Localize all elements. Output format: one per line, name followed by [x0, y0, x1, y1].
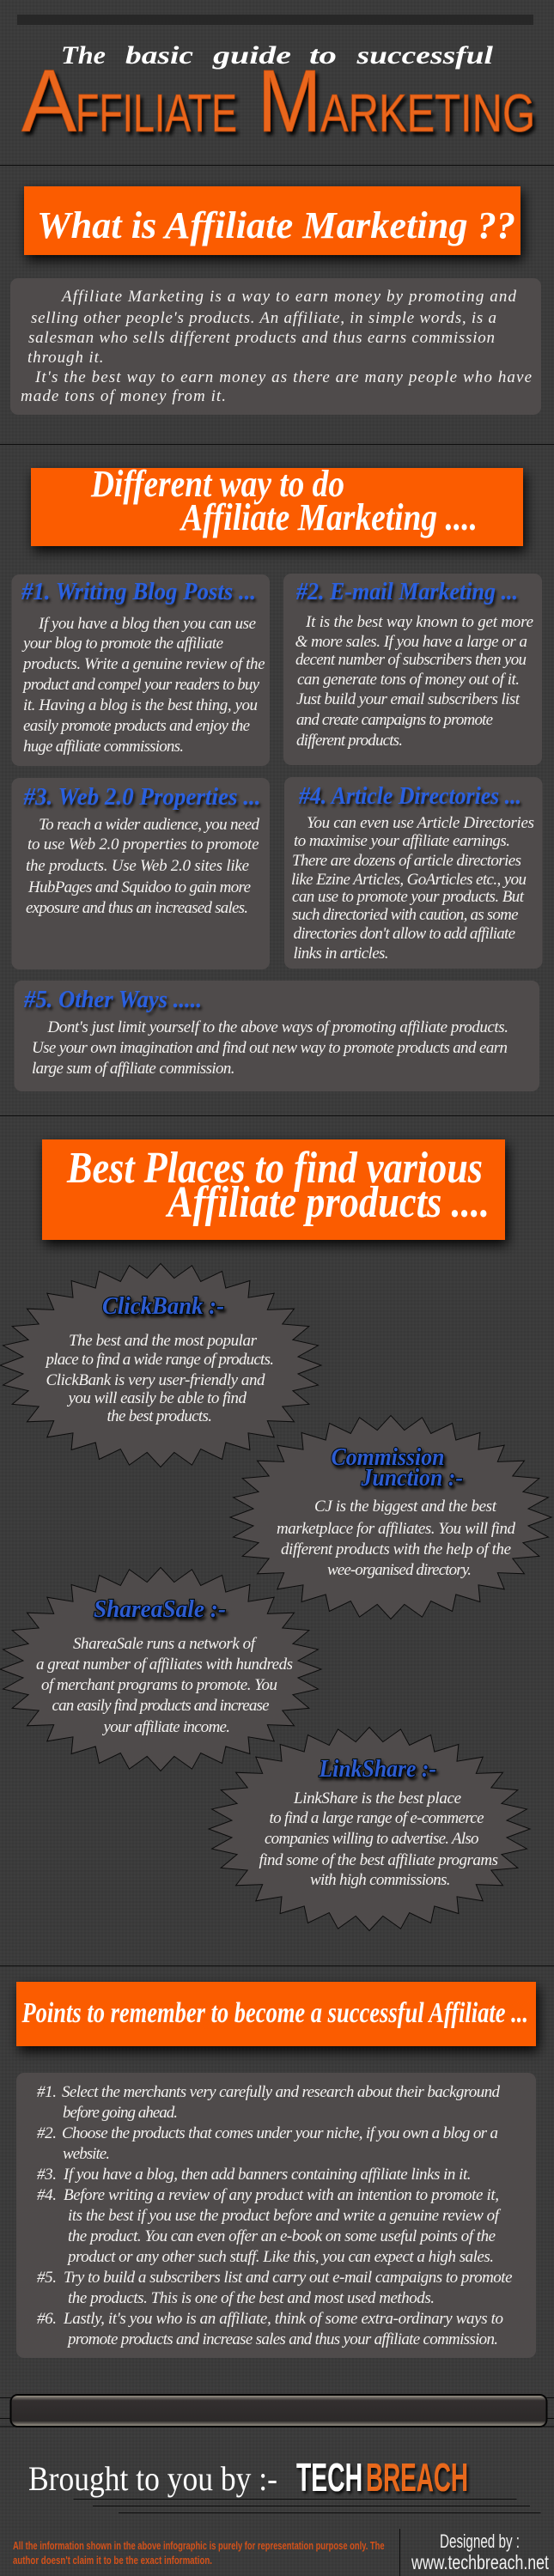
section: points to remember: [16, 1982, 536, 2358]
starburst: LinkShare: LinkShare is the best place: [293, 1789, 461, 1807]
panel: article directories: such directoried with caution, as some: [292, 906, 519, 924]
panel: checklist: [16, 2073, 536, 2358]
starburst: ClickBank: the best products.: [107, 1407, 212, 1425]
panel: web 2.0 properties: HubPages and Squidoo to gain more: [27, 878, 251, 896]
panel: e-mail marketing: and create campaigns to promote: [296, 711, 493, 729]
section: different ways: [12, 463, 543, 1091]
panel: article directories: links in articles.: [294, 945, 388, 963]
panel: definition: It's the best way to earn money as there are many people who have: [34, 368, 532, 386]
panel: writing blog posts: product and compel your readers to buy: [21, 676, 260, 694]
heading: [90, 463, 478, 538]
panel: checklist: #3.: [37, 2166, 57, 2184]
subtitle: basic: [125, 41, 193, 70]
starburst: ShareaSale: can easily find products and increase: [52, 1697, 270, 1715]
logo: TechBreach: BREACH: [366, 2455, 468, 2500]
starburst: Commission Junction: Commission: [332, 1444, 445, 1471]
starburst: ShareaSale: your affiliate income.: [101, 1718, 230, 1736]
starburst: ShareaSale: a great number of affiliates with hundreds: [36, 1656, 293, 1674]
starburst: Commission Junction: CJ is the biggest and the best: [314, 1498, 497, 1516]
main title: Affiliate Marketing: A: [21, 52, 76, 150]
section: best places: [0, 1139, 551, 1930]
panel: article directories: like Ezine Articles, GoArticles etc., you: [291, 871, 527, 889]
panel: article directories: There are dozens of article directories: [292, 852, 521, 870]
subtitle: successful: [356, 41, 494, 70]
subtitle: guide: [212, 41, 291, 70]
panel: other ways: #5. Other Ways .....: [23, 986, 202, 1013]
panel: checklist: the products. This is one of the best and most used methods.: [68, 2289, 435, 2307]
panel: checklist: #6.: [37, 2310, 57, 2328]
logo: TechBreach: [296, 2455, 468, 2500]
panel: other ways: [14, 981, 539, 1091]
starburst: ShareaSale: ShareaSale :-: [94, 1596, 226, 1623]
starburst: Commission Junction: marketplace for affiliates. You will find: [277, 1520, 515, 1538]
starburst: ClickBank: [0, 1264, 321, 1467]
top dark bar: [17, 15, 533, 25]
starburst: ClickBank: ClickBank is very user-friendly and: [46, 1371, 265, 1389]
panel: other ways: large sum of affiliate commission.: [32, 1060, 235, 1078]
starburst: Commission Junction: [230, 1415, 551, 1619]
panel: checklist: Lastly, it's you who is an affiliate, think of some extra-ordinary ways to: [63, 2310, 503, 2328]
starburst: ShareaSale: ShareaSale runs a network of: [73, 1635, 258, 1653]
panel: writing blog posts: [12, 574, 270, 766]
panel: e-mail marketing: #2. E-mail Marketing ...: [295, 578, 518, 605]
panel: article directories: directories don't allow to add affiliate: [294, 925, 515, 943]
panel: checklist: the product. You can even offer an e-book on some useful points of the: [68, 2227, 496, 2245]
panel: checklist: Choose the products that comes under your niche, if you own a blog or a: [62, 2124, 498, 2142]
panel: article directories: #4. Article Directories ...: [298, 782, 521, 810]
main title: Affiliate Marketing: [21, 52, 535, 150]
main title: Affiliate Marketing: M: [258, 52, 321, 150]
panel: e-mail marketing: Just build your email subscribers list: [296, 690, 521, 708]
orange banner background: [24, 186, 521, 255]
heading: Affiliate products ....: [165, 1178, 490, 1227]
starburst: LinkShare: companies willing to advertise. Also: [265, 1830, 479, 1848]
starburst: ClickBank: you will easily be able to find: [67, 1389, 247, 1407]
panel: checklist: before going ahead.: [63, 2104, 178, 2122]
starburst: ClickBank: The best and the most popular: [69, 1332, 258, 1350]
panel: writing blog posts: If you have a blog then you can use: [38, 615, 256, 633]
panel: e-mail marketing: & more sales. If you have a large or a: [295, 633, 527, 651]
panel: checklist: If you have a blog, then add banners containing affiliate links in it.: [63, 2166, 471, 2184]
panel: writing blog posts: #1. Writing Blog Posts ...: [21, 578, 256, 605]
panel: writing blog posts: your blog to promote the affiliate: [21, 635, 223, 653]
panel: definition: [10, 278, 541, 415]
heading: Affiliate Marketing ....: [179, 496, 478, 538]
section: what is affiliate marketing: [10, 186, 541, 415]
panel: checklist: #5.: [37, 2269, 57, 2287]
starburst: Commission Junction: Junction :-: [361, 1465, 463, 1492]
panel: checklist: #4.: [37, 2186, 57, 2204]
subtitle: to: [309, 41, 337, 70]
panel: checklist: #1.: [37, 2083, 57, 2101]
starburst: LinkShare: [209, 1728, 530, 1930]
panel: definition: through it.: [27, 349, 103, 367]
divider bar: [0, 2395, 554, 2427]
title: [21, 41, 535, 150]
heading: [66, 1144, 490, 1227]
panel: definition: made tons of money from it.: [21, 387, 226, 405]
footer credit: brought to you by: Brought to you by :-: [28, 2459, 277, 2498]
orange banner background: [31, 468, 523, 546]
panel: e-mail marketing: [283, 574, 542, 765]
starburst: LinkShare: LinkShare :-: [319, 1756, 436, 1783]
heading: Different way to do: [90, 463, 344, 505]
starburst: LinkShare: to find a large range of e-commerce: [270, 1809, 484, 1827]
panel: definition: selling other people's products. An affiliate, in simple words, is a: [31, 309, 496, 327]
starburst: ShareaSale: [0, 1568, 321, 1771]
disclaimer: [13, 2539, 385, 2567]
panel: web 2.0 properties: [12, 778, 270, 969]
orange banner background: [42, 1139, 505, 1240]
panel: e-mail marketing: It is the best way known to get more: [305, 613, 533, 631]
panel: checklist: its the best if you use the product before and write a genuine review of: [68, 2207, 502, 2225]
panel: checklist: Select the merchants very carefully and research about their background: [62, 2083, 500, 2101]
panel: web 2.0 properties: the products. Use Web 2.0 sites like: [26, 857, 249, 875]
panel: article directories: [284, 777, 543, 969]
panel: e-mail marketing: different products.: [296, 732, 403, 750]
panel: e-mail marketing: can generate tons of money out of it.: [297, 671, 520, 689]
starburst: LinkShare: find some of the best affiliate programs: [259, 1851, 498, 1869]
panel: definition: Affiliate Marketing is a way to earn money by promoting and: [60, 288, 517, 306]
panel: article directories: to maximise your affiliate earnings.: [294, 832, 510, 850]
heading: Best Places to find various: [66, 1144, 483, 1193]
panel: article directories: You can even use Article Directories: [307, 814, 534, 832]
panel: writing blog posts: it. Having a blog is the best thing, you: [23, 696, 258, 714]
subtitle: [61, 41, 494, 70]
panel: checklist: #2.: [37, 2124, 57, 2142]
starburst: ShareaSale: of merchant programs to promote. You: [41, 1676, 277, 1694]
main title: Affiliate Marketing: FFILIATE: [76, 84, 237, 143]
panel: e-mail marketing: decent number of subscribers then you: [295, 651, 527, 669]
disclaimer: author doesn't claim it to be the exact information.: [13, 2554, 212, 2567]
panel: other ways: Dont's just limit yourself to the above ways of promoting affiliate products.: [46, 1018, 508, 1036]
panel: writing blog posts: easily promote products and enjoy the: [23, 717, 250, 735]
designer credit: Designed by :: [440, 2530, 520, 2552]
panel: checklist: website.: [63, 2145, 110, 2163]
starburst: ClickBank: place to find a wide range of products.: [45, 1351, 274, 1369]
panel: writing blog posts: huge affiliate commissions.: [23, 738, 184, 756]
starburst: LinkShare: with high commissions.: [310, 1871, 450, 1889]
panel: definition: salesman who sells different products and thus earns commission: [28, 329, 495, 347]
panel: checklist: product or any other such stuff. Like this, you can expect a high sales.: [66, 2248, 494, 2266]
panel: other ways: Use your own imagination and find out new way to promote products and earn: [32, 1039, 508, 1057]
starburst: Commission Junction: wee-organised directory.: [327, 1561, 472, 1579]
panel: checklist: promote products and increase sales and thus your affiliate commission.: [66, 2330, 498, 2348]
panel: web 2.0 properties: To reach a wider audience, you need: [39, 816, 259, 834]
orange banner background: [16, 1982, 536, 2046]
panel: checklist: Before writing a review of any product with an intention to promote it,: [64, 2186, 499, 2204]
starburst: ClickBank: ClickBank :-: [102, 1293, 224, 1320]
panel: web 2.0 properties: to use Web 2.0 properties to promote: [27, 835, 259, 854]
logo: TechBreach: TECH: [296, 2455, 362, 2500]
panel: web 2.0 properties: exposure and thus an increased sales.: [26, 899, 248, 917]
panel: checklist: Try to build a subscribers list and carry out e-mail campaigns to promote: [64, 2269, 512, 2287]
designer credit: [411, 2530, 549, 2573]
disclaimer: All the information shown in the above infographic is purely for representation purpose only. The: [13, 2539, 385, 2552]
heading: What is Affiliate Marketing ??: [37, 204, 515, 246]
subtitle: The: [61, 41, 106, 70]
panel: web 2.0 properties: #3. Web 2.0 Properties ...: [23, 783, 260, 811]
panel: article directories: can use to promote your products. But: [292, 888, 525, 906]
panel: writing blog posts: products. Write a genuine review of the: [21, 655, 265, 673]
starburst: Commission Junction: different products with the help of the: [281, 1540, 511, 1558]
